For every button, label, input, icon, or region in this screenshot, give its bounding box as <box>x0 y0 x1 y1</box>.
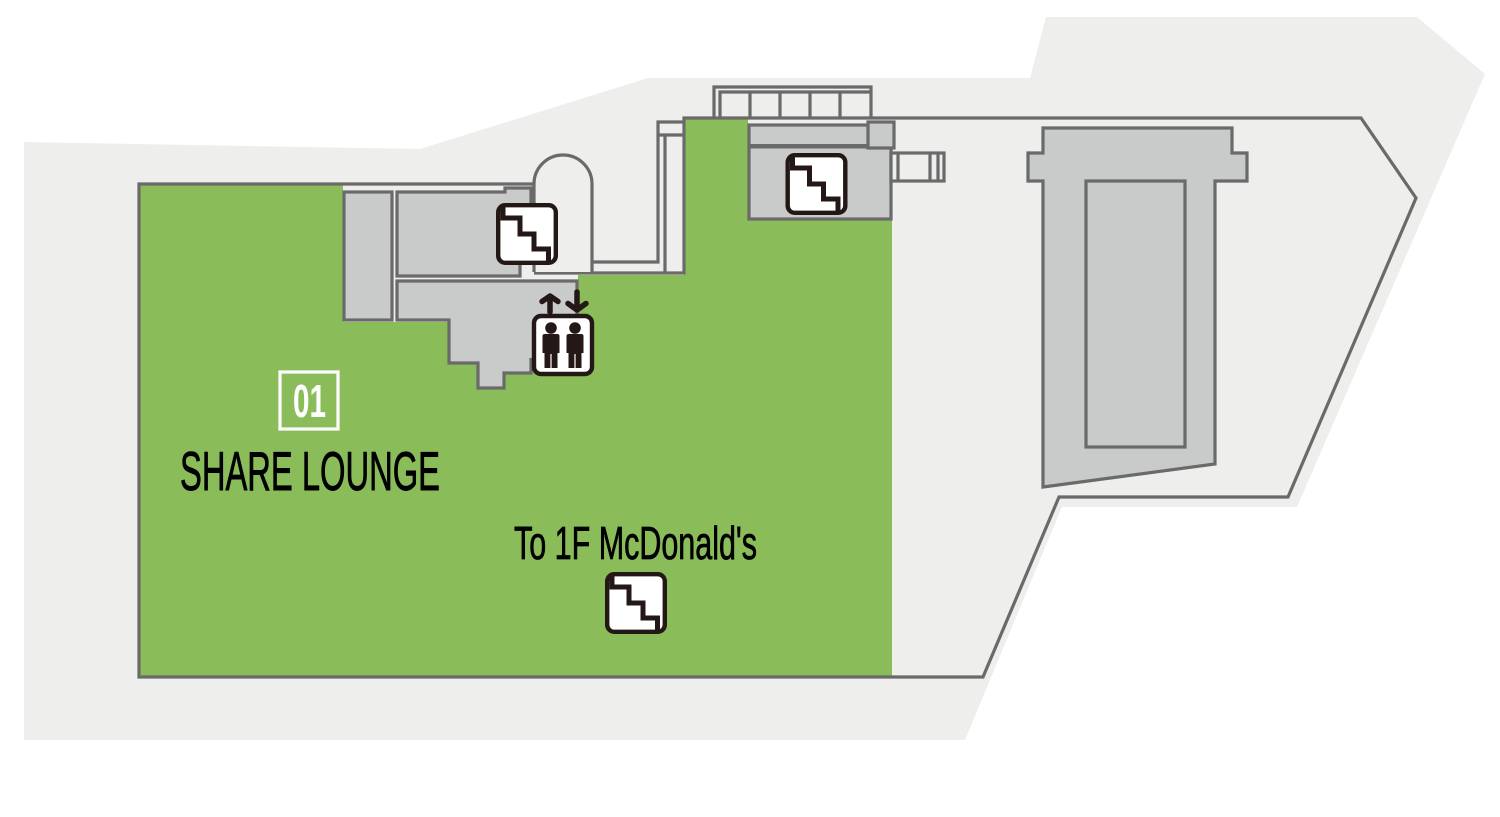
down arrow <box>568 292 586 310</box>
person left <box>542 322 560 368</box>
rooftop structure <box>714 87 871 118</box>
green area: share lounge floor <box>139 118 892 677</box>
icon: stairs north core <box>788 155 845 213</box>
icon: stairs upper core <box>498 205 556 263</box>
person right <box>566 322 584 368</box>
room number badge <box>280 372 338 429</box>
label: share lounge: SHARE LOUNGE <box>180 440 440 502</box>
room: left core column <box>344 192 392 320</box>
side balcony <box>891 153 944 181</box>
icon: elevator <box>534 292 592 374</box>
room: elevator core <box>397 281 577 388</box>
label: to 1F McDonald's: To 1F McDonald's <box>514 517 757 569</box>
elevator box <box>534 316 592 374</box>
neighbouring building inner block <box>1086 181 1185 447</box>
room: upper core <box>397 188 531 276</box>
room: north stair core <box>749 122 894 219</box>
room number badge: 01 <box>293 375 326 427</box>
up arrow <box>542 296 558 312</box>
icon: stairs to 1F <box>607 574 665 632</box>
building outline <box>139 118 1416 677</box>
neighbouring building <box>1028 128 1247 487</box>
